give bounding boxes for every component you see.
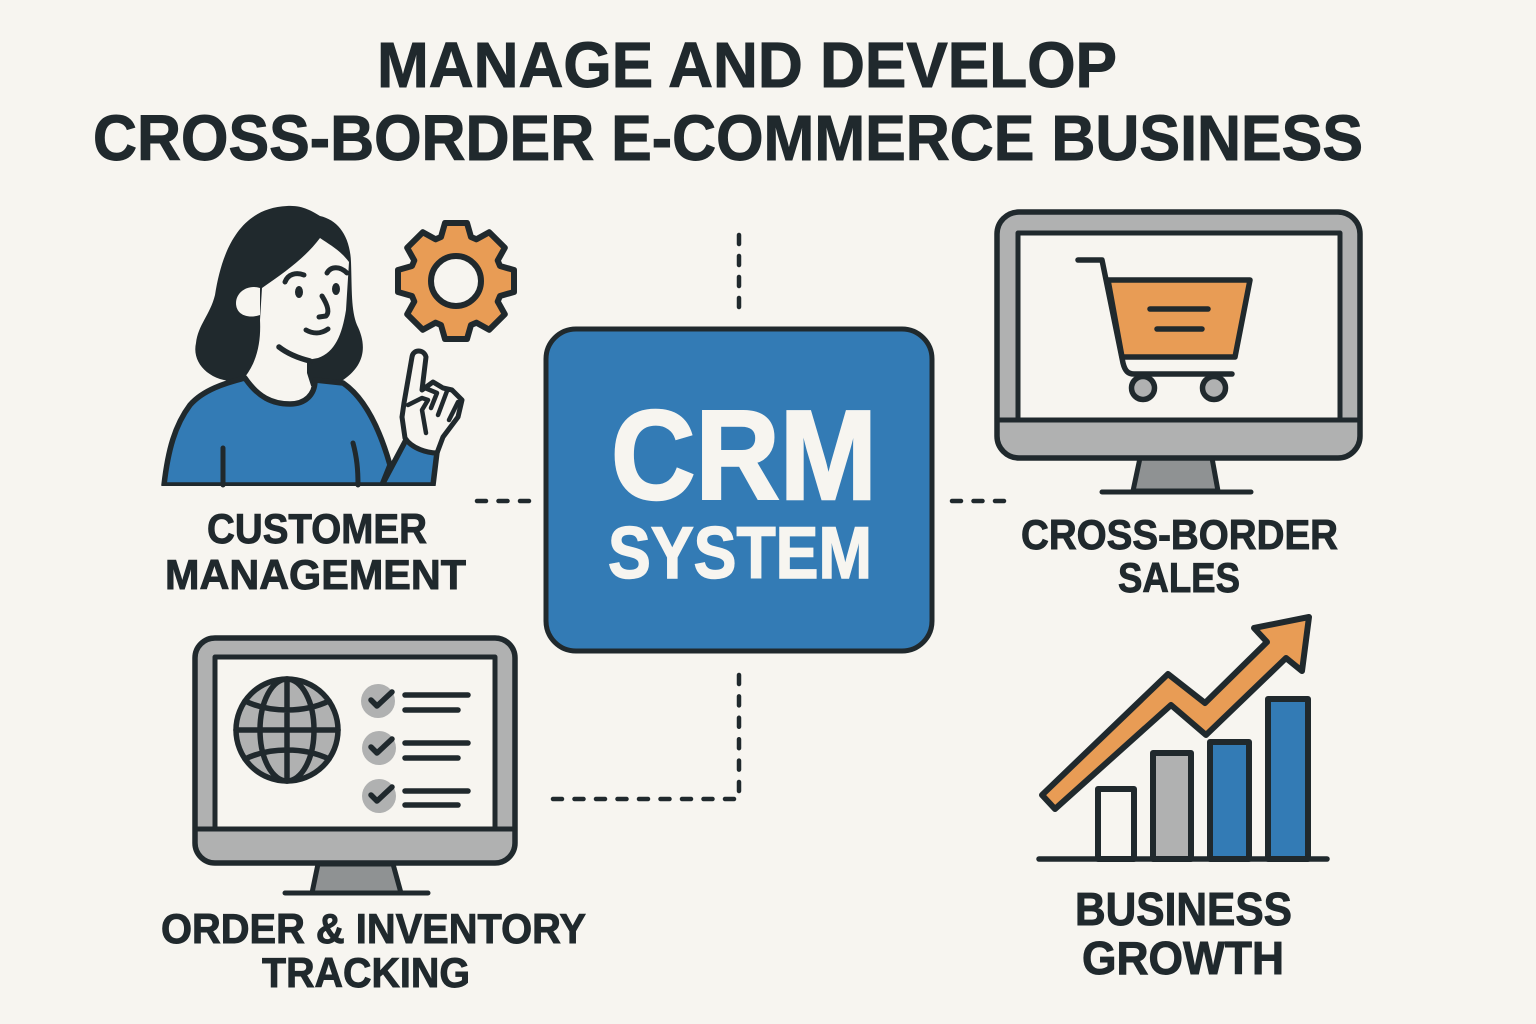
connector: bottom elbow dashed line (553, 675, 739, 799)
label: business growth: GROWTH (1082, 932, 1284, 984)
label: cross-border sales: SALES (1118, 554, 1240, 601)
label: customer management: CUSTOMER (207, 505, 427, 552)
face and neck (245, 238, 349, 403)
label: order and inventory tracking: TRACKING (262, 949, 470, 996)
label: customer management: MANAGEMENT (165, 551, 466, 598)
label: business growth: BUSINESS (1075, 883, 1292, 935)
icon: monitor with shopping cart (997, 212, 1360, 492)
monitor stand (312, 864, 401, 893)
label: cross-border sales: CROSS-BORDER (1021, 511, 1338, 558)
icon: monitor with globe and checklist (195, 638, 515, 893)
sleeve (382, 438, 437, 485)
title (93, 29, 1363, 174)
label: business growth (1075, 883, 1292, 984)
monitor body (997, 212, 1360, 458)
bar chart with growth arrow (1039, 617, 1327, 859)
globe (236, 679, 338, 781)
hair (195, 206, 363, 387)
title: MANAGE AND DEVELOP (377, 29, 1117, 101)
icon: person with gear (155, 206, 514, 494)
growth arrow (1042, 617, 1309, 809)
panel: CRM system (546, 329, 932, 651)
hand (402, 351, 462, 453)
ear (236, 287, 260, 316)
label: order and inventory tracking: ORDER & INVENTORY (161, 905, 586, 952)
monitor screen (1018, 233, 1340, 420)
checklist (361, 684, 468, 813)
monitor body (195, 638, 515, 863)
monitor stand (1133, 458, 1218, 491)
label: customer management (165, 505, 466, 598)
chin line (279, 347, 310, 361)
cart (1078, 260, 1250, 400)
face details (285, 268, 347, 333)
connector: right dashed line (952, 499, 1004, 503)
connector: top dashed line (737, 235, 741, 307)
sweater (164, 378, 390, 485)
label: cross-border sales (1021, 511, 1338, 601)
CRM heading: CRM (611, 384, 877, 526)
title: CROSS-BORDER E-COMMERCE BUSINESS (93, 102, 1363, 174)
SYSTEM heading: SYSTEM (608, 513, 872, 594)
bars (1098, 789, 1134, 859)
gear (398, 223, 514, 339)
connector: left dashed line (477, 499, 529, 503)
label: order and inventory tracking (161, 905, 586, 996)
monitor screen (215, 657, 495, 829)
